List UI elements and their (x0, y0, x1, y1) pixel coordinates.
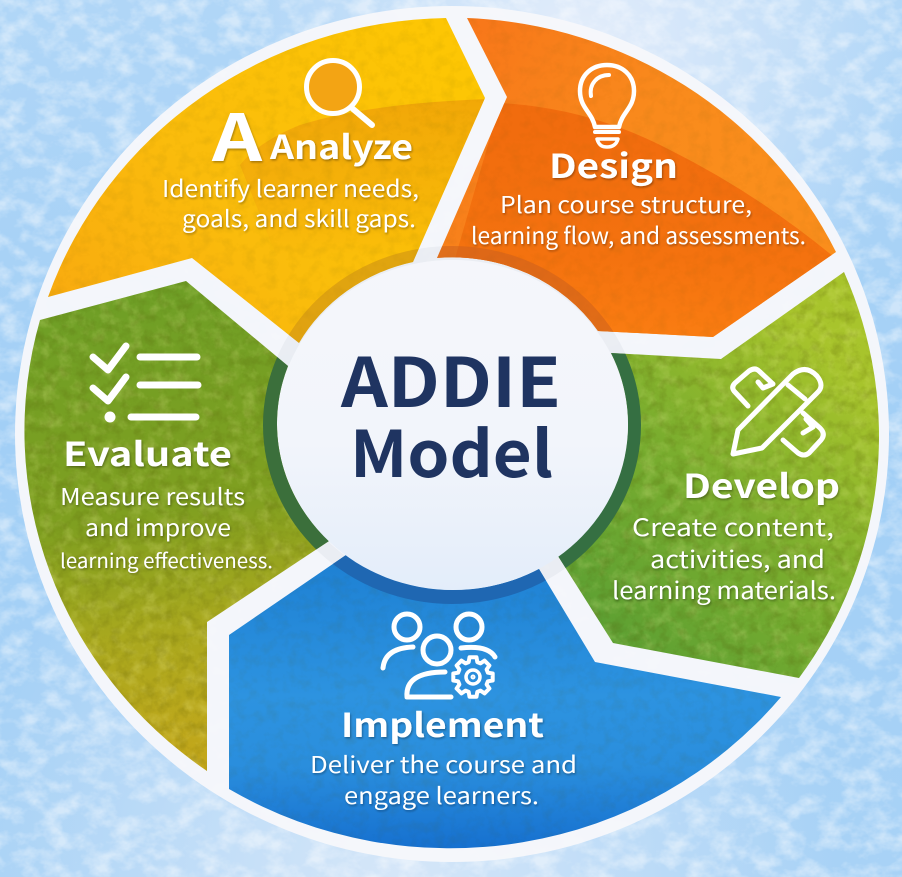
description: Develop: Create content, (632, 508, 834, 543)
description: Design (471, 186, 806, 251)
icon: people and gear (383, 614, 495, 697)
description: Implement (310, 746, 577, 811)
inner ring: Implement (229, 555, 776, 848)
heading: Develop: Develop (683, 460, 840, 508)
inner ring: Evaluate (24, 281, 329, 771)
description: Evaluate: learning effectiveness. (60, 545, 273, 574)
icon: magnifying glass (306, 60, 372, 125)
icon: checklist (93, 346, 198, 422)
heading: Design: Design (549, 140, 678, 188)
segment shape: Implement (229, 555, 781, 848)
description: Evaluate (60, 478, 273, 574)
inner ring: Develop (558, 272, 879, 677)
description: Design: Plan course structure, (500, 186, 752, 220)
description: Design: learning flow, and assessments. (471, 217, 806, 251)
description: Develop: learning materials. (612, 571, 836, 606)
heading: Analyze: Analyze (269, 121, 413, 169)
segment shape: Design (437, 18, 836, 337)
faint hub ring over the gaps (270, 253, 634, 597)
heading: Implement: Implement (341, 699, 544, 747)
center hub (278, 260, 628, 590)
description: Analyze: Identify learner needs, (162, 170, 419, 204)
panel: Evaluate (24, 281, 329, 771)
panel: Design (437, 18, 836, 337)
hub disc (278, 260, 628, 590)
segment shape: Develop (558, 272, 879, 678)
icon: light bulb (580, 65, 634, 147)
title: ADDIE Model: Model (350, 404, 553, 496)
description: Analyze (162, 170, 419, 234)
title: ADDIE Model: ADDIE (340, 328, 561, 427)
segment shape: Analyze (48, 18, 485, 343)
description: Analyze: goals, and skill gaps. (182, 200, 416, 234)
panel: Implement (229, 555, 781, 848)
icon: pencil and ruler (733, 369, 823, 455)
description: Implement: engage learners. (344, 777, 539, 811)
description: Develop: activities, and (650, 540, 825, 575)
description: Evaluate: and improve (85, 509, 231, 543)
segment shape: Evaluate (24, 281, 329, 771)
description: Develop (612, 508, 836, 606)
heading: Evaluate: Evaluate (63, 428, 232, 476)
panel: Develop (558, 272, 879, 678)
panel: Analyze (48, 18, 485, 343)
shading: Analyze (48, 22, 484, 343)
description: Evaluate: Measure results (60, 478, 245, 512)
title: ADDIE Model (340, 328, 561, 496)
letter A: A (211, 86, 262, 180)
description: Implement: Deliver the course and (310, 746, 577, 780)
shading: Design (437, 18, 832, 337)
